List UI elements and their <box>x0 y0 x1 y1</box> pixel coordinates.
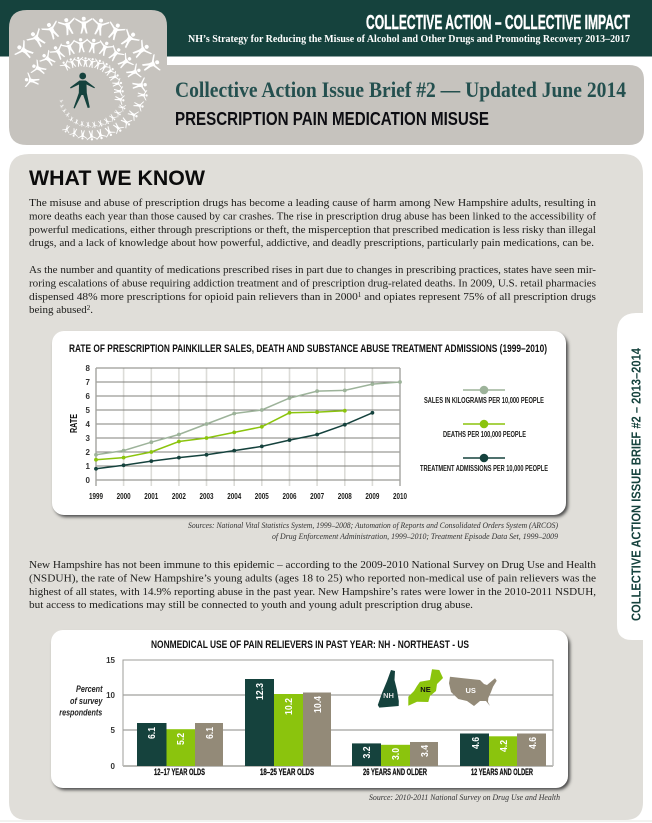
category labels: 12 YEARS AND OLDER <box>471 767 533 777</box>
bars: 12 years and older: 4.6 <box>528 737 539 749</box>
side tab text: COLLECTIVE ACTION ISSUE BRIEF #2 – 2013–2014 <box>630 348 644 621</box>
category labels: 26 YEARS AND OLDER <box>363 767 427 777</box>
y axis caption: respondents <box>59 708 102 718</box>
bar chart <box>106 656 553 777</box>
bars: 12-17 year olds: 6.1 <box>147 727 158 739</box>
paragraph 3: New Hampshire has not been immune to this epidemic – according to the 2009-2010 National Survey on Drug Use and Health <box>29 559 596 571</box>
header subtitle: NH’s Strategy for Reducing the Misuse of Alcohol and Other Drugs and Promoting Recovery 2013–2017 <box>188 34 630 45</box>
side tab <box>617 313 652 640</box>
y axis title: RATE <box>68 414 80 433</box>
logo: spiral of people <box>13 16 162 141</box>
paragraph 3: (NSDUH), the rate of New Hampshire’s young adults (ages 18 to 25) who reported non-medical use of pain relievers was the <box>29 572 596 584</box>
bar chart axis labels <box>106 656 116 771</box>
y axis labels: 6 <box>86 392 91 401</box>
x axis labels <box>89 492 407 501</box>
y axis labels <box>86 364 91 485</box>
category labels: 12–17 YEAR OLDS <box>154 767 205 777</box>
x axis labels: 2004 <box>227 492 242 501</box>
x axis labels: 2002 <box>172 492 186 501</box>
paragraph 2: . <box>90 304 93 316</box>
y axis caption: Percent <box>76 684 103 695</box>
legend: DEATHS PER 100,000 PEOPLE <box>443 430 526 439</box>
bars: 18-25 year olds <box>245 679 331 766</box>
bar chart axis labels: 5 <box>111 726 116 735</box>
heading: WHAT WE KNOW <box>29 166 206 190</box>
header band <box>0 0 652 56</box>
y axis labels: 1 <box>86 462 91 471</box>
y axis caption: of survey <box>70 696 103 707</box>
x axis labels: 2007 <box>310 492 325 501</box>
series: deaths <box>94 409 347 462</box>
series: treatment admissions <box>94 411 374 471</box>
legend <box>420 386 548 473</box>
x axis labels: 1999 <box>89 492 103 501</box>
y axis labels: 8 <box>86 364 91 373</box>
line chart card <box>52 331 568 517</box>
icon: United States map: US <box>465 686 476 695</box>
bar chart source: Source: 2010-2011 National Survey on Drug Use and Health <box>369 792 560 802</box>
icon: central standing figure <box>70 73 95 108</box>
bar chart axis labels: 10 <box>106 691 116 700</box>
bar chart axis labels: 15 <box>106 656 116 665</box>
line chart sources <box>188 520 559 541</box>
bars: 18-25 year olds: 12.3 <box>255 683 266 700</box>
x axis labels: 2010 <box>393 492 407 501</box>
paragraph 2: dispensed 48% more prescriptions for opioid pain relievers than in 2000 <box>29 291 347 303</box>
icon: Northeast map <box>408 669 443 706</box>
x axis labels: 2001 <box>144 492 159 501</box>
bars: 12 years and older <box>460 734 546 766</box>
y axis labels: 4 <box>86 420 91 429</box>
line chart <box>68 364 407 501</box>
x axis labels: 2009 <box>365 492 380 501</box>
y axis labels: 7 <box>86 378 91 387</box>
line chart sources: Sources: National Vital Statistics System, 1999–2008; Automation of Reports and Consolidated Orders System (ARCOS) <box>188 520 558 530</box>
paragraph 1: powerful medications, either through prescriptions or theft, the misperception that prescribed medication is less risky than illegal <box>29 224 596 236</box>
paragraph 1 <box>29 197 597 249</box>
bars: 12 years and older: 4.2 <box>499 740 510 752</box>
bars: 18-25 year olds: 10.2 <box>284 698 295 715</box>
icon: New Hampshire map <box>378 670 399 708</box>
paragraph 2: 2 <box>87 304 91 312</box>
legend: TREATMENT ADMISSIONS PER 10,000 PEOPLE <box>420 464 548 473</box>
y axis labels: 3 <box>86 434 91 443</box>
brief subtitle: PRESCRIPTION PAIN MEDICATION MISUSE <box>175 109 489 129</box>
y axis labels: 5 <box>86 406 91 415</box>
y axis caption <box>59 684 103 718</box>
x axis labels: 2006 <box>282 492 297 501</box>
paragraph 2: being abused <box>29 304 87 316</box>
icon: Northeast map: NE <box>420 685 431 694</box>
paragraph 3: highest of all states, with 14.9% reporting abuse in the past year. New Hampshire’s rates were lower in the 2010-2011 NSDUH, <box>29 586 596 598</box>
y axis labels: 0 <box>86 476 91 485</box>
bars: 12 years and older: 4.6 <box>471 737 482 749</box>
bars: 12-17 year olds: 5.2 <box>176 733 187 745</box>
paragraph 1: The misuse and abuse of prescription drugs has become a leading cause of harm among New Hampshire adults, resulting in <box>29 197 597 209</box>
bars: 26 years and older: 3.2 <box>362 746 373 758</box>
category labels: 18–25 YEAR OLDS <box>260 767 314 777</box>
paragraph 3: but access to medications may still be connected to youth and young adult prescription drug abuse. <box>29 599 473 611</box>
series: sales <box>94 380 402 457</box>
bars: 26 years and older: 3.4 <box>420 745 431 757</box>
paragraph 2 <box>29 264 596 316</box>
paragraph 1: more deaths each year than those caused by car crashes. The rise in prescription drug abuse has been linked to the accessibility of <box>29 210 596 222</box>
icon: United States map <box>449 677 497 706</box>
x axis labels: 2005 <box>255 492 269 501</box>
paragraph 1: drugs, and a lack of knowledge about how powerful, addictive, and deadly prescriptions, particularly pain medications, can be. <box>29 237 594 249</box>
category labels <box>154 767 533 777</box>
x axis labels: 2000 <box>117 492 131 501</box>
line chart sources: of Drug Enforcement Administration, 1999–2010; Treatment Episode Data Set, 1999–2009 <box>272 531 559 541</box>
icon: New Hampshire map: NH <box>383 691 394 700</box>
paragraph 2: and opiates represent 75% of all prescription drugs <box>361 291 596 303</box>
panel: title and logo <box>9 10 644 145</box>
paragraph 2: roring escalations of abuse requiring addiction treatment and of prescription drug-related deaths. In 2009, U.S. retail pharmacies <box>29 277 596 289</box>
paragraph 2: 1 <box>358 291 362 299</box>
bar chart card <box>51 630 570 790</box>
y axis labels: 2 <box>86 448 91 457</box>
bars: 26 years and older: 3.0 <box>391 748 402 760</box>
bar chart axis labels: 0 <box>111 762 116 771</box>
paragraph 2: As the number and quantity of medications prescribed rises in part due to changes in prescribing practices, states have seen mir- <box>29 264 596 276</box>
bars: 12-17 year olds <box>137 723 223 766</box>
bars: 12-17 year olds: 6.1 <box>205 727 216 739</box>
bars: 26 years and older <box>352 742 438 766</box>
legend: SALES IN KILOGRAMS PER 10,000 PEOPLE <box>424 396 544 405</box>
x axis labels: 2003 <box>200 492 214 501</box>
bar chart title: NONMEDICAL USE OF PAIN RELIEVERS IN PAST YEAR: NH - NORTHEAST - US <box>151 639 469 651</box>
paragraph 3 <box>29 559 596 611</box>
x axis labels: 2008 <box>338 492 352 501</box>
bars: 18-25 year olds: 10.4 <box>313 696 324 713</box>
